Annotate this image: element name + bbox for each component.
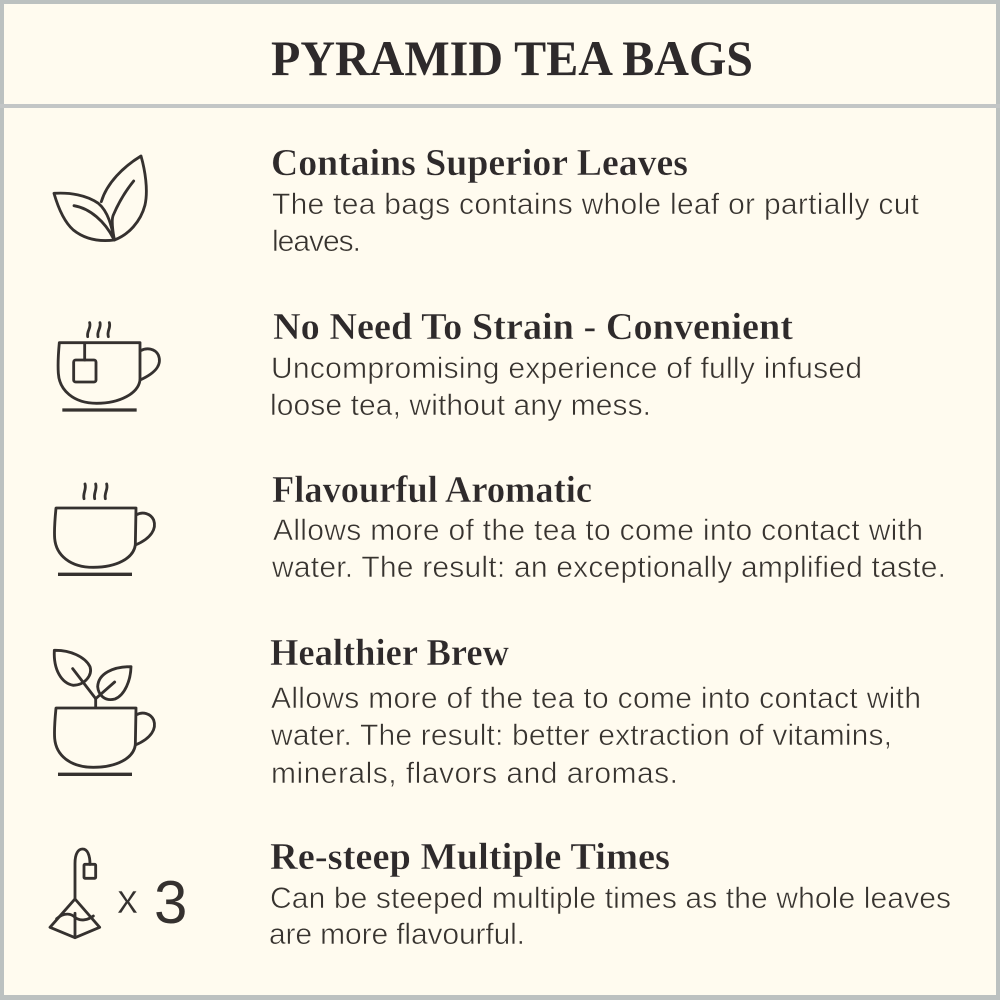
- multiplier x 3: [117, 869, 187, 936]
- panel: no need to strain: [58, 306, 862, 422]
- description: [271, 514, 946, 584]
- heading: Contains Superior Leaves: [271, 142, 688, 184]
- description: minerals, flavors and aromas.: [271, 757, 678, 790]
- description: Allows more of the tea to come into contact with: [273, 514, 923, 547]
- icon: steaming cup: [54, 484, 154, 574]
- description: Allows more of the tea to come into contact with: [271, 682, 921, 715]
- description: Uncompromising experience of fully infused: [271, 352, 862, 385]
- heading: Re-steep Multiple Times: [270, 836, 670, 878]
- description: [270, 352, 862, 422]
- panel: re-steep: [50, 836, 951, 951]
- icon: cup with tea bag: [58, 323, 159, 410]
- description: loose tea, without any mess.: [270, 389, 651, 422]
- description: [272, 188, 920, 258]
- panel: flavourful aromatic: [54, 469, 946, 584]
- heading: No Need To Strain - Convenient: [273, 306, 793, 348]
- multiplier x 3: 3: [154, 869, 187, 936]
- heading: Flavourful Aromatic: [272, 469, 592, 511]
- description: leaves.: [272, 225, 361, 258]
- panel: healthier brew: [54, 632, 921, 790]
- heading: Healthier Brew: [270, 632, 510, 674]
- description: The tea bags contains whole leaf or partially cut: [272, 188, 920, 221]
- icon: cup with sprout: [54, 650, 154, 774]
- title: PYRAMID TEA BAGS: [271, 30, 753, 86]
- icon: pyramid tea bag: [50, 849, 100, 938]
- description: water. The result: an exceptionally amplified taste.: [271, 551, 946, 584]
- icon: two leaves: [54, 156, 146, 241]
- description: water. The result: better extraction of vitamins,: [270, 719, 892, 752]
- description: [269, 882, 951, 951]
- description: Can be steeped multiple times as the whole leaves: [270, 882, 951, 915]
- description: [270, 682, 921, 790]
- panel: superior leaves: [54, 142, 920, 258]
- multiplier x 3: x: [117, 875, 138, 922]
- description: are more flavourful.: [269, 918, 525, 951]
